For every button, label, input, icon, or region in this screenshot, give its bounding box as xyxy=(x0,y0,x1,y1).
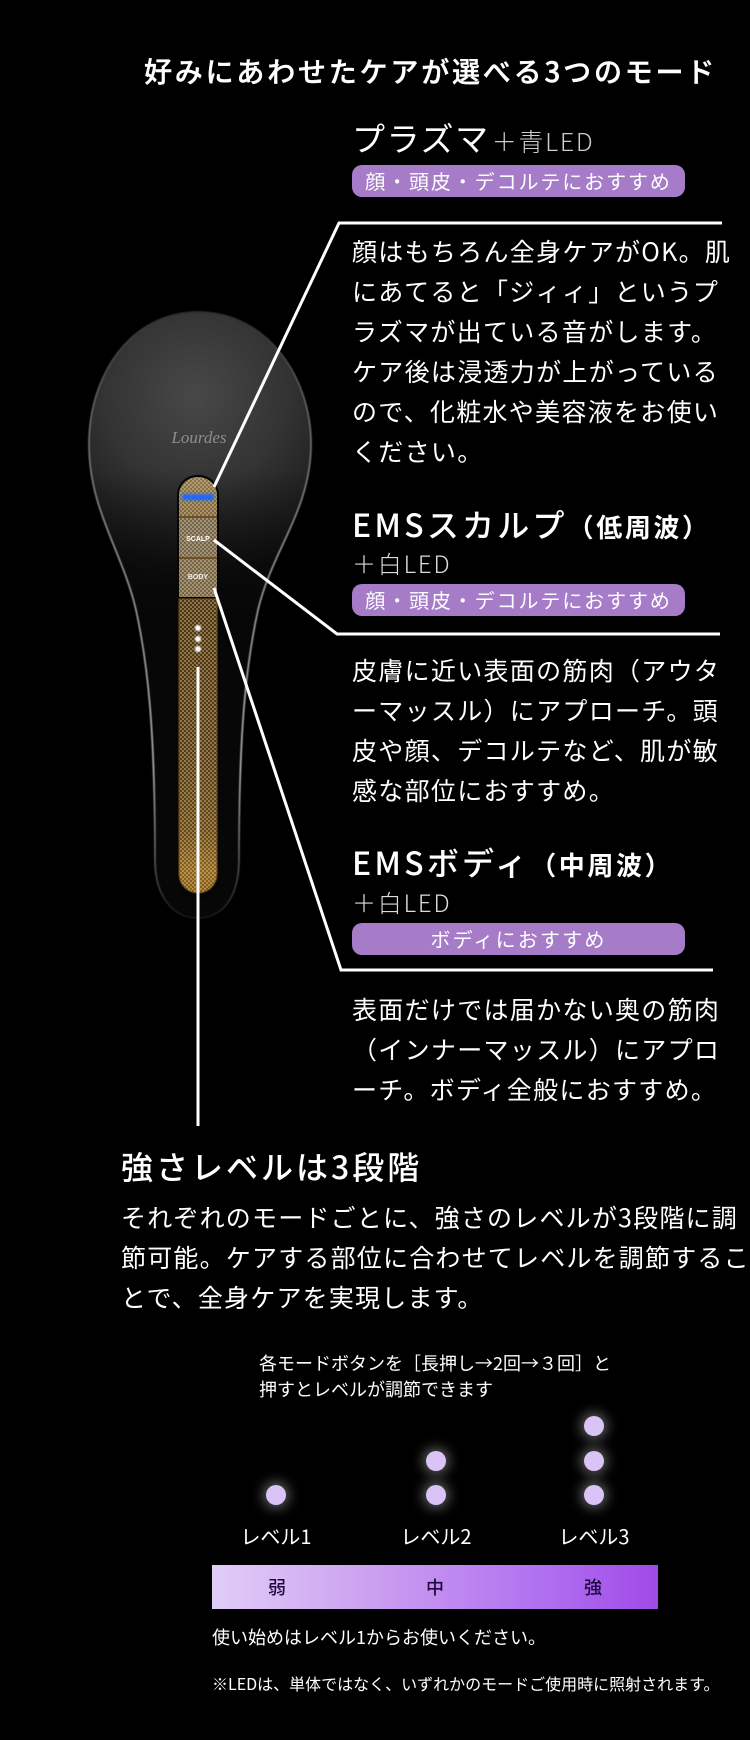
pill: EMS body recommendation: ボディにおすすめ xyxy=(430,924,607,953)
text: EMS scalp description xyxy=(352,652,720,808)
text: usage note: 使い始めはレベル1からお使いください。 xyxy=(212,1624,546,1650)
text: plasma description xyxy=(352,233,731,469)
scalp button xyxy=(179,518,217,557)
text: EMS body description xyxy=(352,991,720,1107)
button panel xyxy=(177,475,219,899)
pill: plasma recommendation: 顔・頭皮・デコルテにおすすめ xyxy=(365,166,672,195)
text: plasma description: ラズマが出ている音がします。 xyxy=(352,313,717,349)
text: LED footnote: ※LEDは、単体ではなく、いずれかのモードご使用時に照射されます。 xyxy=(212,1671,720,1695)
text: intensity description: それぞれのモードごとに、強さのレベルが3段階に調 xyxy=(121,1199,738,1235)
title: 好みにあわせたケアが選べる3つのモード xyxy=(144,51,717,91)
intensity gradient bar xyxy=(212,1565,658,1609)
text: EMS scalp LED: ＋白LED xyxy=(352,545,451,580)
text: EMS body description: （インナーマッスル）にアプロ xyxy=(352,1031,720,1067)
text: plasma description: ので、化粧水や美容液をお使い xyxy=(352,393,719,429)
scalp button: SCALP xyxy=(186,536,210,543)
text: intensity description xyxy=(121,1199,750,1315)
label: weak: 弱 xyxy=(268,1574,286,1600)
heading: EMS body mode: EMSボディ（中周波） xyxy=(352,839,673,885)
level 2 indicator xyxy=(416,1441,456,1515)
text: button instructions: 各モードボタンを［長押し→2回→３回］と xyxy=(259,1350,611,1376)
text: plasma description: ください。 xyxy=(352,433,484,469)
heading: intensity levels: 強さレベルは3段階 xyxy=(121,1143,422,1189)
indicator lights xyxy=(195,625,201,652)
level 1 indicator xyxy=(256,1475,296,1515)
gold mesh strip xyxy=(179,599,217,893)
pill: EMS body recommendation xyxy=(352,923,685,955)
label: strong: 強 xyxy=(584,1574,602,1600)
text: button instructions: 押すとレベルが調節できます xyxy=(259,1376,493,1402)
heading: EMS scalp mode: EMSスカルプ（低周波） xyxy=(352,501,711,547)
label: level 2: レベル2 xyxy=(400,1521,472,1550)
device body xyxy=(89,312,311,918)
text: EMS scalp description: ーマッスル）にアプローチ。頭 xyxy=(352,692,719,728)
text: EMS scalp description: 皮膚に近い表面の筋肉（アウタ xyxy=(352,652,720,688)
text: EMS body description: ーチ。ボディ全般におすすめ。 xyxy=(352,1071,717,1107)
text: intensity description: とで、全身ケアを実現します。 xyxy=(121,1279,484,1315)
text: EMS scalp description: 皮や顔、デコルテなど、肌が敏 xyxy=(352,732,719,768)
text: EMS body LED: ＋白LED xyxy=(352,884,451,919)
text: EMS scalp description: 感な部位におすすめ。 xyxy=(352,772,615,808)
plasma button: PLASMA xyxy=(183,495,213,502)
text: plasma description: ケア後は浸透力が上がっている xyxy=(352,353,719,389)
label: medium: 中 xyxy=(426,1574,444,1600)
heading: plasma mode: プラズマ＋青LED xyxy=(352,113,594,161)
text: plasma description: 顔はもちろん全身ケアがOK。肌 xyxy=(352,233,731,269)
plasma button xyxy=(179,477,217,516)
label: level 3: レベル3 xyxy=(558,1521,630,1550)
level 3 indicator xyxy=(574,1406,614,1515)
text: EMS body description: 表面だけでは届かない奥の筋肉 xyxy=(352,991,720,1027)
body button xyxy=(179,559,217,597)
label: level 1: レベル1 xyxy=(240,1521,312,1550)
text: intensity description: 節可能。ケアする部位に合わせてレベルを調節するこ xyxy=(121,1239,750,1275)
pill: EMS scalp recommendation: 顔・頭皮・デコルテにおすすめ xyxy=(365,585,672,614)
text: button instructions xyxy=(259,1350,611,1402)
text: plasma description: にあてると「ジィィ」というプ xyxy=(352,273,719,309)
brand logo: Lourdes xyxy=(170,428,227,447)
body button: BODY xyxy=(188,574,208,581)
